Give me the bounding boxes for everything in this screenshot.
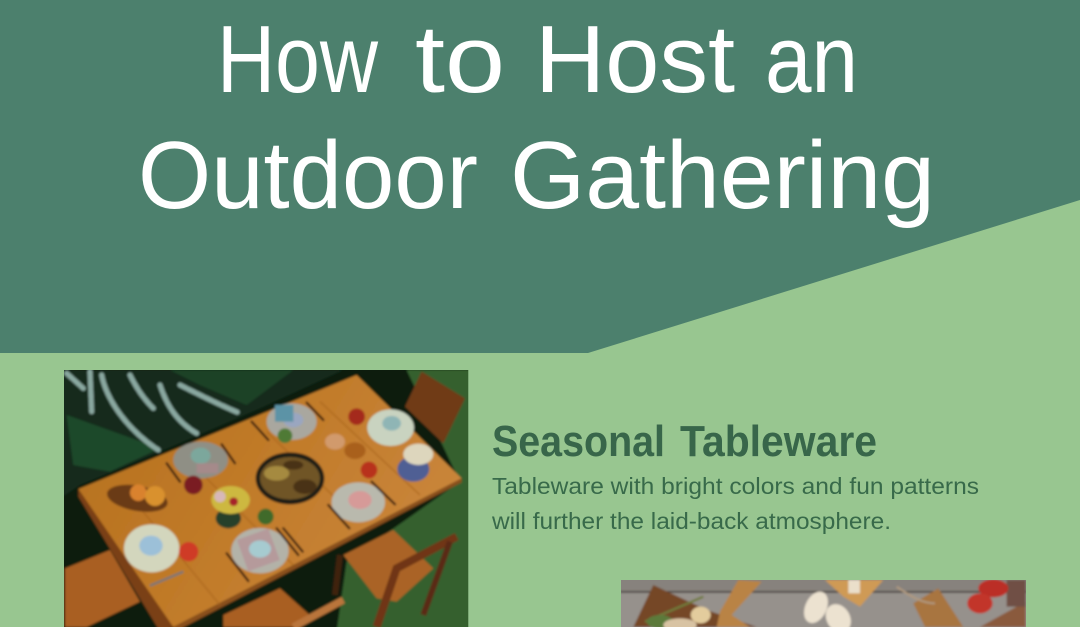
small bowls bbox=[325, 434, 345, 450]
header banner bbox=[0, 0, 1080, 353]
section body text: Tableware with bright colors and fun patterns bbox=[492, 473, 979, 499]
jug bbox=[397, 456, 429, 482]
bread board bbox=[106, 484, 168, 513]
plates and bowls bbox=[124, 403, 414, 573]
table top bbox=[78, 375, 462, 627]
title: How bbox=[217, 6, 379, 113]
cutting board left bbox=[633, 585, 757, 627]
title: Outdoor bbox=[138, 122, 478, 229]
photo: wooden boards and bread bbox=[621, 580, 1026, 627]
cutlery bbox=[167, 403, 395, 581]
title: Gathering bbox=[510, 122, 935, 229]
section heading: Seasonal Tableware bbox=[492, 417, 877, 466]
title: an bbox=[765, 6, 858, 113]
photo: outdoor dining table bbox=[60, 365, 473, 627]
paella pan bbox=[256, 452, 324, 504]
section heading: Seasonal Tableware: Tableware bbox=[680, 417, 877, 466]
bread bbox=[825, 580, 883, 607]
flowers bbox=[216, 508, 241, 528]
chairs bbox=[405, 372, 465, 443]
title: to bbox=[415, 6, 505, 113]
right board bbox=[913, 588, 963, 627]
strawberries bbox=[978, 579, 1008, 597]
title bbox=[138, 6, 935, 229]
title: Host bbox=[535, 6, 735, 113]
section body text: will further the laid-back atmosphere. bbox=[491, 508, 891, 534]
section body text bbox=[491, 473, 979, 534]
glasses bbox=[179, 542, 198, 561]
section heading: Seasonal Tableware: Seasonal bbox=[492, 417, 665, 466]
